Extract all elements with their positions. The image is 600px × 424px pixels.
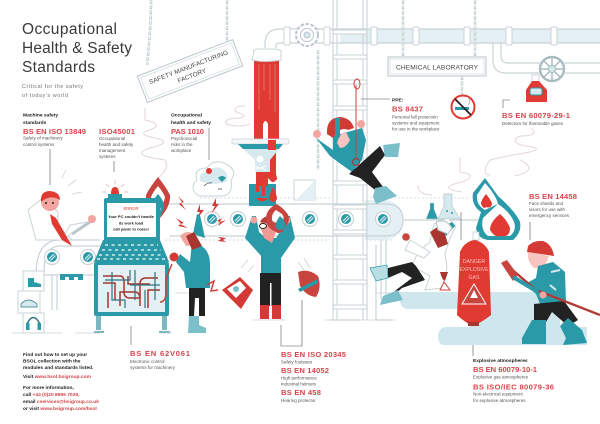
icon: pipe valve wheel: [540, 57, 564, 81]
text: explosive atmospheres: BS ISO/IEC 80079-36: [473, 382, 554, 392]
man at desk: [28, 170, 96, 246]
ladder: [333, 0, 367, 320]
computer machine: Your PC couldn't handle: [108, 214, 155, 219]
text: contact details: BSOL collection with the: [23, 358, 81, 364]
subtitle: of today's world: [22, 93, 68, 99]
text: BS 8437: [392, 98, 440, 132]
scientist: [370, 218, 456, 305]
icon: gas detector: [526, 75, 547, 102]
text: PAS 1010: workplace: [171, 148, 192, 153]
icon: central valve: [296, 24, 318, 46]
red drips and teal container: [249, 168, 277, 206]
text: machine safety standards: Safety of machinery: [23, 136, 64, 140]
text: ISO45001: management: [99, 148, 126, 153]
text: PPE standards: Safety footwear: [281, 360, 313, 364]
text: ISO45001: systems: [99, 154, 116, 159]
title: Standards: [22, 59, 95, 76]
sign: safety manufacturing factory: FACTORY: [177, 67, 208, 85]
extinguisher: GAS: [469, 275, 480, 281]
text: explosive atmospheres: Explosive gas atmospheres: [473, 374, 529, 380]
chains: [147, 0, 475, 170]
text: PPE standards: BS EN 458: [281, 388, 321, 397]
text: PPE standards: [281, 350, 347, 403]
sign: chemical laboratory: CHEMICAL LABORATORY: [396, 64, 479, 72]
sign: safety manufacturing factory: SAFETY MANUFACTURING: [148, 49, 229, 86]
text: BS 8437: Personal fall protection: [392, 114, 438, 120]
text: contact details: Visit www.bsol.bsigroup.com: [23, 374, 92, 380]
text: machine safety standards: Machine safety: [23, 112, 58, 118]
text: PAS 1010: Psychosocial: [171, 136, 197, 141]
text: BS EN 62V061: systems for machinery: [130, 365, 176, 370]
conveyor belt: [36, 198, 478, 320]
text: explosive atmospheres: for explosive atmospheres: [473, 398, 526, 403]
text: machine safety standards: BS EN ISO 13849: [23, 127, 86, 136]
text: PAS 1010: PAS 1010: [171, 127, 204, 136]
text: ISO45001: health and safety: [99, 142, 134, 147]
falling laptop: [222, 260, 254, 309]
leader lines: [50, 99, 530, 356]
text: contact details: or visit www.bsigroup.com/bsol: [23, 406, 97, 412]
siren: [102, 180, 128, 198]
text: contact details: email cservices@bsigroup.co.uk: [23, 399, 99, 405]
text: explosive atmospheres: BS EN 60079-10-1: [473, 365, 538, 374]
title: [22, 21, 132, 76]
text: PPE standards: Hearing protector: [281, 398, 316, 403]
text: BS EN 14458: Face shields and: [529, 201, 564, 206]
title: Occupational: [22, 21, 117, 38]
text: BS EN 62V061: BS EN 62V061: [130, 349, 191, 358]
text: PPE standards: BS EN 14052: [281, 366, 329, 375]
smoke squiggles: [142, 106, 536, 195]
computer machine: [94, 198, 172, 332]
text: machine safety standards: standards: [23, 120, 47, 126]
icons: PPE product boxes: [18, 271, 83, 333]
text: contact details: Find out how to set up your: [23, 352, 87, 358]
text: ISO45001: [99, 127, 136, 159]
puddle: [400, 292, 587, 345]
funnel with skull: [232, 139, 289, 172]
text: ISO45001: Occupational: [99, 136, 125, 141]
red liquid column: [252, 49, 281, 180]
text: BS EN 14458: [529, 192, 577, 218]
text: BS 8437: BS 8437: [392, 104, 423, 114]
flame above worker: [266, 204, 289, 233]
box on conveyor: [294, 180, 315, 200]
text: explosive atmospheres: [473, 358, 554, 403]
text: BS 8437: for use in the workplace: [392, 126, 440, 132]
icon: no smoking sign: [452, 96, 474, 118]
text: contact details: [23, 352, 99, 412]
falling helmet and ear protector: [298, 258, 320, 297]
text: PPE standards: BS EN ISO 20345: [281, 350, 347, 359]
firefighter: [501, 241, 600, 345]
text: explosive atmospheres: Non-electrical equipment: [473, 392, 524, 396]
big flames: [473, 178, 520, 240]
computer machine: call panic in noise!: [113, 226, 149, 232]
extinguisher: DANGER: [463, 259, 485, 265]
text: BS EN 14458: visors for use with: [529, 207, 566, 212]
top pipe network: [265, 27, 600, 73]
text: contact details: For more information,: [23, 385, 74, 391]
text: PAS 1010: health and safety: [171, 120, 211, 126]
text: BS 8437: systems and equipment: [392, 120, 440, 126]
text: PPE standards: High performance: [281, 376, 317, 380]
flasks: [426, 194, 460, 219]
text: BS EN 62V061: [130, 349, 191, 370]
text: BS EN 14458: BS EN 14458: [529, 192, 577, 201]
floor lines: [12, 293, 400, 333]
text: PAS 1010: [171, 112, 211, 153]
text: BS EN 62V061: Electronic control: [130, 359, 165, 364]
computer machine: its work load: [119, 220, 144, 226]
subtitle: [22, 84, 83, 99]
text: contact details: call +44 (0)20 8996 7029,: [23, 392, 80, 398]
stress thought cloud: [193, 162, 234, 196]
text: PAS 1010: Occupational: [171, 112, 203, 118]
text: BS EN 60079-29-1: BS EN 60079-29-1: [502, 111, 571, 120]
sign: chemical laboratory: [388, 57, 486, 76]
text: PPE standards: industrial helmets: [281, 382, 317, 386]
text: BS EN 60079-29-1: [502, 111, 571, 126]
subtitle: Critical for the safety: [22, 84, 83, 90]
text: PAS 1010: risks in the: [171, 142, 193, 147]
climbing worker: [313, 79, 400, 204]
text: explosive atmospheres: Explosive atmospheres: [473, 358, 528, 364]
text: contact details: modules and standards listed.: [23, 365, 94, 371]
lightning bolts: [176, 196, 226, 242]
computer machine: ERROR: [123, 206, 139, 211]
sign: safety manufacturing factory: [137, 40, 243, 102]
text: machine safety standards: [23, 112, 86, 147]
extinguisher: EXPLOSIVE: [459, 267, 489, 273]
electrocuted worker: [170, 214, 218, 333]
extinguisher: [457, 232, 491, 326]
text: BS EN 14458: emergency services: [529, 213, 570, 218]
text: ISO45001: ISO45001: [99, 127, 136, 136]
text: BS EN 60079-29-1: Detectors for flammable gases: [502, 121, 564, 126]
flame: computer: [146, 177, 170, 222]
title: Health & Safety: [22, 40, 132, 57]
text: BS 8437: PPE:: [392, 98, 404, 104]
central worker: [245, 216, 295, 319]
text: machine safety standards: control systems: [23, 142, 55, 147]
